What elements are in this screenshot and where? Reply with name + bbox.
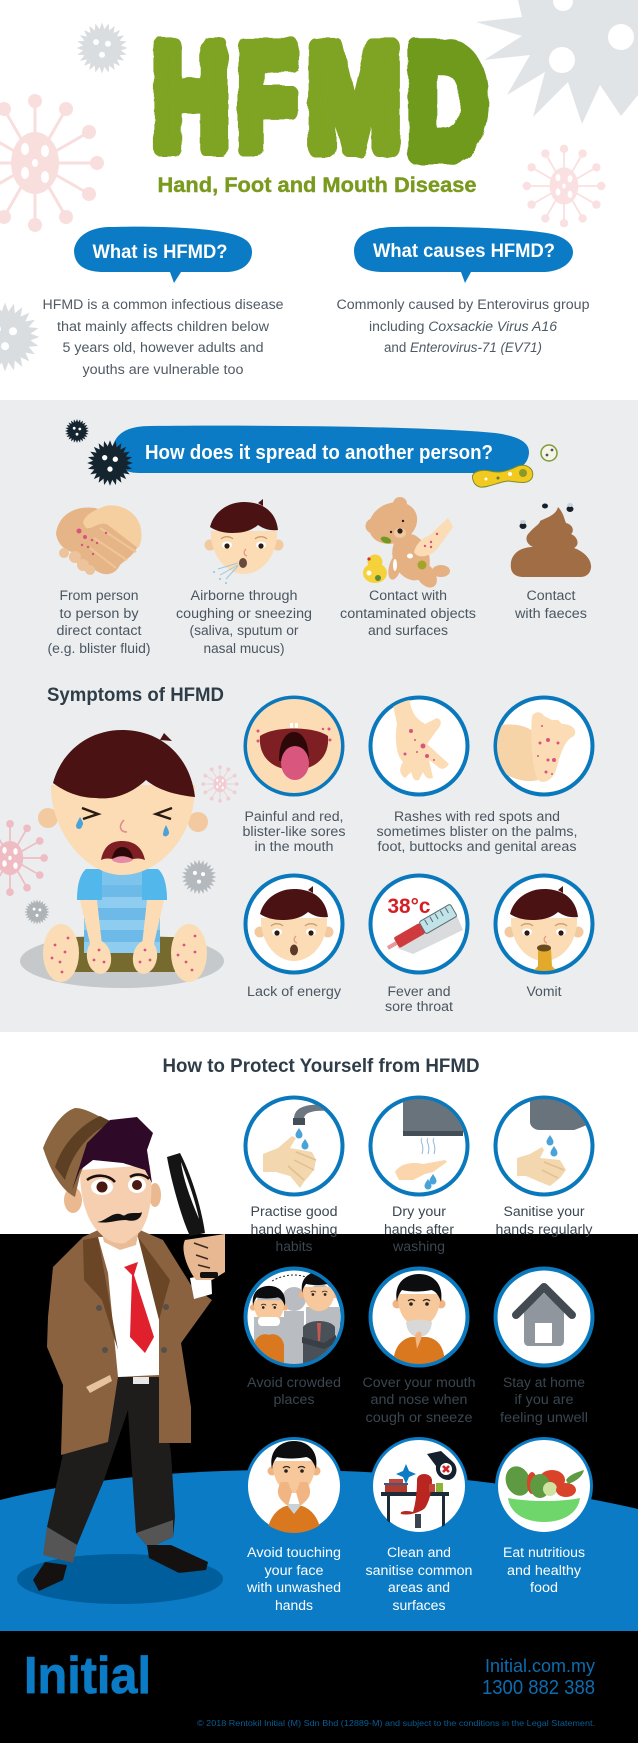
caption: faeces	[514, 588, 587, 621]
caption: sores in mouth: Painful and red,	[244, 809, 344, 824]
caption: eat food: Eat nutritious	[503, 1545, 585, 1560]
symptom icon: sores in mouth	[244, 696, 344, 796]
contact phone: 1300 882 388	[482, 1677, 595, 1699]
symptom icon: hand rash	[370, 696, 468, 794]
caption: hand washing: hand washing	[250, 1222, 338, 1237]
caption: contaminated objects: and surfaces	[368, 623, 448, 638]
symptom icon: fever thermometer: 38°c	[388, 895, 431, 918]
caption: fever	[385, 984, 453, 1014]
protect icon: sanitiser	[496, 1096, 594, 1194]
grey panel: spread and symptoms	[0, 400, 638, 1032]
protect icon: hand washing	[246, 1098, 342, 1194]
icon: pink virus right	[523, 145, 605, 227]
symptom icon: fever thermometer	[370, 876, 468, 972]
title: M	[307, 15, 401, 180]
text: what is HFMD: youths are vulnerable too	[82, 362, 244, 377]
caption: avoid crowded: places	[274, 1392, 315, 1407]
caption: vomit: Vomit	[526, 984, 562, 999]
caption: airborne: coughing or sneezing	[176, 606, 312, 621]
text: what is HFMD: HFMD is a common infectious disease	[42, 297, 284, 312]
caption: cover mouth: cough or sneeze	[366, 1410, 472, 1425]
caption: person to person: (e.g. blister fluid)	[48, 641, 150, 656]
caption: person to person: to person by	[60, 606, 139, 621]
heading: symptoms: Symptoms of HFMD	[47, 685, 224, 706]
banner: how does it spread: How does it spread to another person?	[145, 442, 493, 464]
caption: rashes: Rashes with red spots and	[394, 809, 560, 824]
protect icon: avoid touching face	[246, 1438, 342, 1536]
text: what causes HFMD: including Coxsackie Virus A16	[369, 319, 558, 334]
caption: dry hands: Dry your	[392, 1204, 447, 1219]
caption: avoid crowded: Avoid crowded	[247, 1375, 341, 1390]
caption: contaminated objects: contaminated objects	[340, 606, 476, 621]
caption: hand washing: habits	[276, 1239, 313, 1254]
contact website: Initial.com.my	[485, 1656, 595, 1676]
caption: stay home: if you are	[514, 1392, 574, 1407]
title: H	[153, 17, 229, 180]
symptom icon: lack of energy	[246, 876, 342, 972]
icon: faeces with flies	[511, 503, 591, 577]
bubble: what is HFMD: What is HFMD?	[92, 242, 228, 263]
protect icon: stay home	[496, 1268, 592, 1366]
heading: protect yourself: How to Protect Yourself from HFMD	[162, 1056, 480, 1077]
text: what causes HFMD: Commonly caused by Enterovirus group	[336, 297, 590, 312]
caption: rashes: sometimes blister on the palms,	[376, 824, 578, 839]
title: D	[408, 15, 486, 189]
text: what is HFMD	[42, 297, 284, 377]
protect icon: clean surfaces	[372, 1438, 466, 1534]
caption: fever: sore throat	[385, 999, 453, 1014]
caption: stay home: Stay at home	[503, 1375, 585, 1390]
caption: person to person: direct contact	[56, 623, 142, 638]
title	[153, 15, 486, 189]
icon: teddy bear and duck	[362, 494, 453, 592]
caption: sanitise	[496, 1204, 593, 1237]
caption: lack of energy: Lack of energy	[247, 984, 341, 999]
caption: cover mouth	[362, 1375, 476, 1425]
caption: rashes: foot, buttocks and genital areas	[378, 839, 577, 854]
caption: contaminated objects	[340, 588, 476, 638]
symptom icon: foot rash	[494, 698, 592, 794]
caption: fever: Fever and	[388, 984, 450, 999]
caption: cover mouth: and nose when	[370, 1392, 468, 1407]
icon: grey virus left edge	[0, 295, 47, 379]
caption: clean surfaces: sanitise common	[366, 1563, 472, 1578]
caption: sanitise: hands regularly	[496, 1222, 593, 1237]
caption: dry hands	[384, 1204, 455, 1254]
caption: avoid touching: with unwashed	[246, 1580, 341, 1595]
protect icon: hand dryer	[370, 1096, 469, 1194]
protect icon: healthy food	[496, 1438, 592, 1534]
caption: stay home: feeling unwell	[500, 1410, 588, 1425]
subtitle: Hand, Foot and Mouth Disease	[158, 174, 476, 197]
illustration: detective	[17, 1108, 225, 1604]
caption: person to person: From person	[60, 588, 138, 603]
caption: airborne: (saliva, sputum or	[190, 623, 299, 638]
white background panel	[0, 0, 638, 400]
legal statement: © 2018 Rentokil Initial (M) Sdn Bhd (12889-M) and subject to the conditions in the Legal Statement.	[197, 1718, 595, 1728]
caption: avoid touching: hands	[275, 1598, 313, 1613]
caption: sores in mouth: in the mouth	[254, 839, 334, 854]
caption: airborne: nasal mucus)	[204, 641, 284, 656]
bubble: what causes HFMD	[354, 227, 573, 283]
icon: small grey virus top left	[71, 17, 133, 79]
caption: faeces: Contact	[526, 588, 576, 603]
caption: contaminated objects: Contact with	[369, 588, 447, 603]
caption: eat food: food	[530, 1580, 558, 1595]
protect icon: avoid crowded places	[246, 1268, 342, 1367]
caption: avoid crowded	[247, 1375, 341, 1407]
icon: large grey virus top right	[476, 0, 638, 124]
icon: small dark virus	[62, 416, 92, 446]
caption: cover mouth: Cover your mouth	[362, 1375, 476, 1390]
caption: sanitise: Sanitise your	[504, 1204, 585, 1219]
icon: yellow bacterium	[472, 465, 533, 487]
caption: clean surfaces: surfaces	[392, 1598, 446, 1613]
icon: sick child illustration	[0, 730, 239, 988]
text: what is HFMD: that mainly affects children below	[57, 319, 269, 334]
icon: green cell	[541, 445, 557, 461]
icon: large dark virus	[82, 435, 138, 491]
bubble: what causes HFMD: What causes HFMD?	[373, 241, 555, 262]
caption: hand washing	[250, 1204, 338, 1254]
caption: sores in mouth: blister-like sores	[242, 824, 346, 839]
blue curved ground	[0, 1470, 638, 1631]
caption: airborne: Airborne through	[190, 588, 298, 603]
title: F	[237, 16, 297, 180]
icon: handshake	[56, 505, 141, 575]
text: what is HFMD: 5 years old, however adults and	[62, 340, 264, 355]
logo: Initial: Initial	[24, 1647, 151, 1705]
icon: coughing child	[204, 499, 284, 584]
banner: how does it spread	[112, 426, 529, 473]
caption: clean surfaces: Clean and	[387, 1545, 451, 1560]
caption: avoid touching: Avoid touching	[247, 1545, 341, 1560]
caption: faeces: with faeces	[514, 606, 587, 621]
caption: dry hands: washing	[392, 1239, 445, 1254]
caption: avoid touching: your face	[264, 1563, 324, 1578]
caption: sores in mouth	[242, 809, 346, 854]
white panel: protection	[0, 1032, 638, 1234]
caption: avoid touching	[246, 1545, 341, 1613]
caption: eat food	[503, 1545, 585, 1595]
caption: airborne	[176, 588, 312, 656]
caption: person to person	[48, 588, 150, 656]
caption: clean surfaces	[366, 1545, 472, 1613]
caption: clean surfaces: areas and	[388, 1580, 450, 1595]
caption: stay home	[500, 1375, 588, 1425]
caption: hand washing: Practise good	[250, 1204, 338, 1219]
symptom icon: vomit	[496, 876, 592, 974]
icon: pink virus left	[0, 94, 104, 232]
protect icon: cover mouth	[370, 1268, 468, 1367]
black panel	[0, 1234, 638, 1743]
caption: eat food: and healthy	[507, 1563, 581, 1578]
bubble: what is HFMD	[74, 227, 252, 283]
text: what causes HFMD: and Enterovirus-71 (EV71)	[384, 340, 542, 355]
text: what causes HFMD	[336, 297, 590, 355]
caption: dry hands: hands after	[384, 1222, 455, 1237]
caption: rashes	[376, 809, 578, 854]
